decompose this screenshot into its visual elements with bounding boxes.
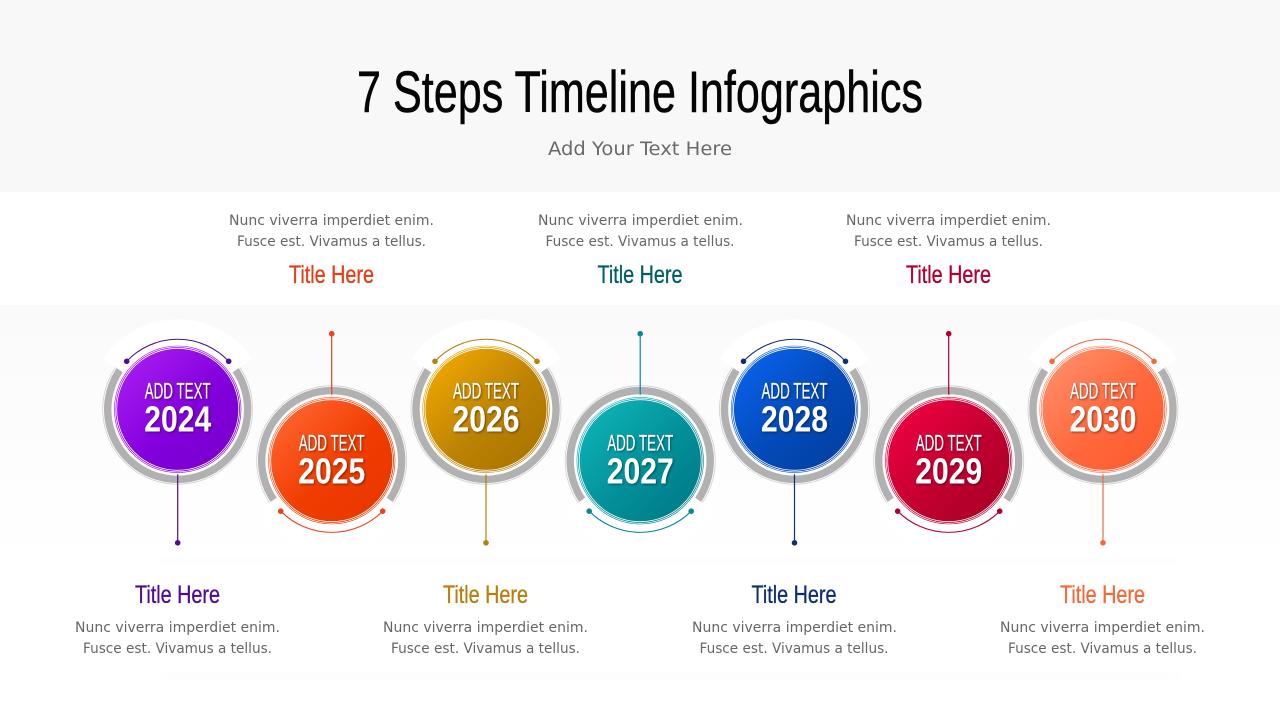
year: 2026 — [452, 398, 520, 439]
step 5 text: Nunc viverra imperdiet enim. — [692, 620, 897, 636]
gray ring — [1033, 370, 1173, 479]
gray ring — [570, 391, 710, 500]
year: 2024 — [144, 398, 211, 439]
disc label: ADD TEXT — [762, 378, 828, 403]
step 1 title: Title Here — [135, 581, 220, 609]
step 3 text: Nunc viverra imperdiet enim. — [383, 620, 588, 636]
year: 2030 — [1070, 398, 1136, 439]
year: 2028 — [761, 398, 828, 439]
disc label: ADD TEXT — [145, 378, 211, 403]
connector — [175, 474, 180, 546]
disc — [577, 397, 704, 524]
step 1 text: Nunc viverra imperdiet enim. — [75, 620, 280, 636]
disc label: ADD TEXT — [453, 378, 519, 403]
arc with dots — [741, 339, 848, 364]
step 2 title: Title Here — [289, 261, 374, 289]
connector — [637, 331, 643, 395]
step 7 text: Fusce est. Vivamus a tellus. — [1008, 641, 1197, 657]
arc with dots — [586, 508, 694, 532]
disc label: ADD TEXT — [299, 431, 365, 456]
connector — [1100, 474, 1106, 546]
white wedge — [720, 319, 869, 409]
step 2 text: Nunc viverra imperdiet enim. — [229, 213, 434, 229]
disc label: ADD TEXT — [607, 431, 673, 456]
step 3 title: Title Here — [443, 581, 528, 609]
step 7 text — [1000, 620, 1205, 657]
white wedge — [257, 461, 406, 551]
step 6 text — [846, 213, 1051, 250]
step 4 text: Fusce est. Vivamus a tellus. — [546, 234, 734, 250]
disc — [268, 397, 395, 524]
step 2: 2025 — [257, 331, 407, 551]
disc — [422, 346, 550, 473]
arc with dots — [895, 508, 1002, 532]
gray ring — [879, 391, 1019, 500]
arc with dots — [278, 508, 386, 532]
step 6 title: Title Here — [906, 261, 991, 289]
gray ring — [108, 370, 248, 479]
white wedge — [874, 461, 1023, 551]
disc label: ADD TEXT — [1070, 378, 1136, 403]
gray ring — [416, 370, 556, 479]
step 3 text — [383, 620, 588, 657]
step 6: 2029 — [874, 331, 1024, 551]
step 4 text — [538, 213, 743, 250]
connector — [946, 331, 952, 395]
step 4: 2027 — [565, 331, 715, 551]
year: 2025 — [298, 451, 365, 492]
arc with dots — [124, 339, 232, 364]
step 1 text — [75, 620, 280, 657]
step 5 title: Title Here — [752, 581, 836, 609]
step 4 title: Title Here — [598, 261, 682, 289]
step 7: 2030 — [1028, 319, 1178, 546]
step 7 text: Nunc viverra imperdiet enim. — [1000, 620, 1205, 636]
step 1: 2024 — [103, 319, 253, 546]
step 2 text — [229, 213, 434, 250]
disc label: ADD TEXT — [916, 431, 982, 456]
year: 2029 — [915, 451, 982, 492]
disc — [885, 397, 1012, 524]
arc with dots — [1049, 339, 1157, 364]
step 5 text: Fusce est. Vivamus a tellus. — [700, 641, 888, 657]
step 6 text: Fusce est. Vivamus a tellus. — [854, 234, 1043, 250]
white wedge — [1028, 319, 1178, 409]
title: 7 Steps Timeline Infographics — [357, 60, 923, 125]
connector — [483, 474, 489, 546]
step 7 title: Title Here — [1060, 581, 1145, 609]
arc with dots — [432, 339, 540, 364]
step 5 text — [692, 620, 897, 657]
gray ring — [724, 370, 864, 479]
step 1 text: Fusce est. Vivamus a tellus. — [83, 641, 272, 657]
step 2 text: Fusce est. Vivamus a tellus. — [237, 234, 426, 250]
step 5: 2028 — [720, 319, 870, 546]
disc — [731, 346, 858, 473]
disc — [114, 346, 241, 473]
gray ring — [262, 391, 402, 500]
white wedge — [566, 461, 715, 551]
step 6 text: Nunc viverra imperdiet enim. — [846, 213, 1051, 229]
connector — [329, 331, 334, 395]
white wedge — [103, 319, 252, 409]
year: 2027 — [607, 451, 674, 492]
white wedge — [411, 319, 561, 409]
connector — [792, 474, 797, 546]
subtitle: Add Your Text Here — [548, 139, 732, 160]
step 4 text: Nunc viverra imperdiet enim. — [538, 213, 743, 229]
step 3: 2026 — [411, 319, 561, 546]
step 3 text: Fusce est. Vivamus a tellus. — [391, 641, 580, 657]
disc — [1039, 346, 1167, 473]
